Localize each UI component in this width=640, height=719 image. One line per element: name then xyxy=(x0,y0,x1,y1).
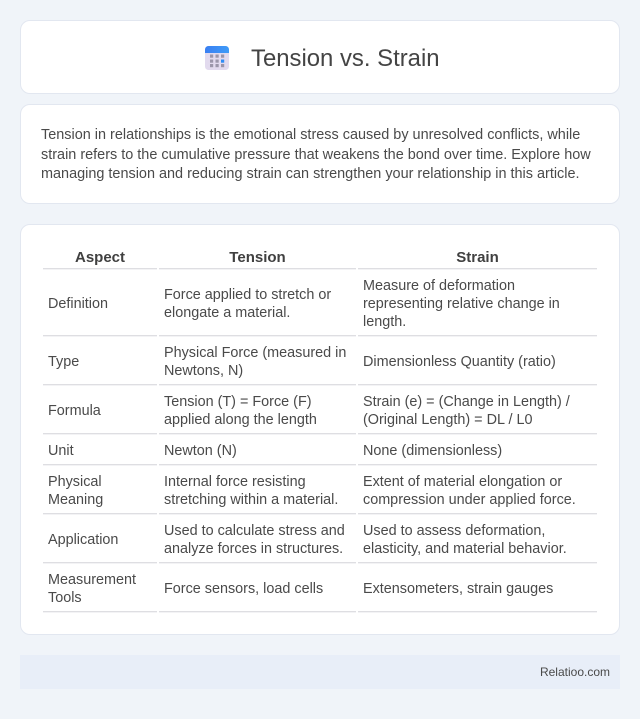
Formula: Tension xyxy=(164,394,317,428)
Definition: Strain xyxy=(363,278,560,330)
row: Physical Meaning: Meaning xyxy=(48,492,103,508)
panel: header xyxy=(20,20,620,94)
Application: Strain: elasticity, and material behavior. xyxy=(363,541,567,557)
table header: Aspect: Aspect xyxy=(75,249,125,266)
Formula: Strain: Strain (e) = (Change in Length) / xyxy=(363,394,570,410)
intro text xyxy=(41,127,591,182)
Type: Tension: Newtons, N) xyxy=(164,363,243,379)
Application: Strain: Used to assess deformation, xyxy=(363,523,545,539)
Formula: Strain xyxy=(363,394,570,428)
row: Application: Application xyxy=(48,532,118,548)
Formula: Tension: applied along the length xyxy=(164,412,317,428)
footer bar xyxy=(20,655,620,689)
intro text: managing tension and reducing strain can strengthen your relationship in this article. xyxy=(41,166,580,182)
intro text: Tension in relationships is the emotional stress caused by unresolved conflicts, while xyxy=(41,127,580,143)
Physical Meaning: Tension: Internal force resisting xyxy=(164,474,306,490)
row: Formula: Formula xyxy=(48,403,101,419)
Physical Meaning: Strain xyxy=(363,474,576,508)
title: Tension vs. Strain xyxy=(251,45,440,72)
Type: Tension: Physical Force (measured in xyxy=(164,345,346,361)
Measurement Tools: Strain: Extensometers, strain gauges xyxy=(363,581,553,597)
panel: introduction xyxy=(20,104,620,204)
Physical Meaning: Tension: stretching within a material. xyxy=(164,492,338,508)
Definition: Strain: length. xyxy=(363,314,406,330)
Application: Tension xyxy=(164,523,345,557)
row: Type: Type xyxy=(48,354,79,370)
Application: Tension: Used to calculate stress and xyxy=(164,523,345,539)
row: Physical Meaning: Physical xyxy=(48,474,102,490)
Type: Strain: Dimensionless Quantity (ratio) xyxy=(363,354,556,370)
row: Measurement Tools xyxy=(48,572,136,606)
Definition: Strain: Measure of deformation xyxy=(363,278,515,294)
row: Physical Meaning xyxy=(48,474,103,508)
row: Measurement Tools: Tools xyxy=(48,590,82,606)
Definition: Tension xyxy=(164,287,331,321)
Measurement Tools: Tension: Force sensors, load cells xyxy=(164,581,323,597)
panel: comparison table xyxy=(20,224,620,635)
Definition: Strain: representing relative change in xyxy=(363,296,560,312)
row: Unit: Unit xyxy=(48,443,74,459)
Application: Strain xyxy=(363,523,567,557)
Formula: Strain: (Original Length) = DL / L0 xyxy=(363,412,532,428)
icon: calendar xyxy=(205,46,229,70)
table header: Strain: Strain xyxy=(456,249,499,266)
Definition: Tension: elongate a material. xyxy=(164,305,290,321)
Application: Tension: analyze forces in structures. xyxy=(164,541,343,557)
Type: Tension xyxy=(164,345,346,379)
Definition: Tension: Force applied to stretch or xyxy=(164,287,331,303)
row: Definition: Definition xyxy=(48,296,108,312)
footer credit: Relatioo.com xyxy=(540,665,610,679)
table header: Tension: Tension xyxy=(229,249,286,266)
Unit: Strain: None (dimensionless) xyxy=(363,443,502,459)
Formula: Tension: Tension (T) = Force (F) xyxy=(164,394,312,410)
Physical Meaning: Strain: compression under applied force. xyxy=(363,492,576,508)
Unit: Tension: Newton (N) xyxy=(164,443,237,459)
intro text: strain refers to the cumulative pressure that weakens the bond over time. Explore how xyxy=(41,146,591,162)
Physical Meaning: Strain: Extent of material elongation or xyxy=(363,474,562,490)
Physical Meaning: Tension xyxy=(164,474,338,508)
row: Measurement Tools: Measurement xyxy=(48,572,136,588)
